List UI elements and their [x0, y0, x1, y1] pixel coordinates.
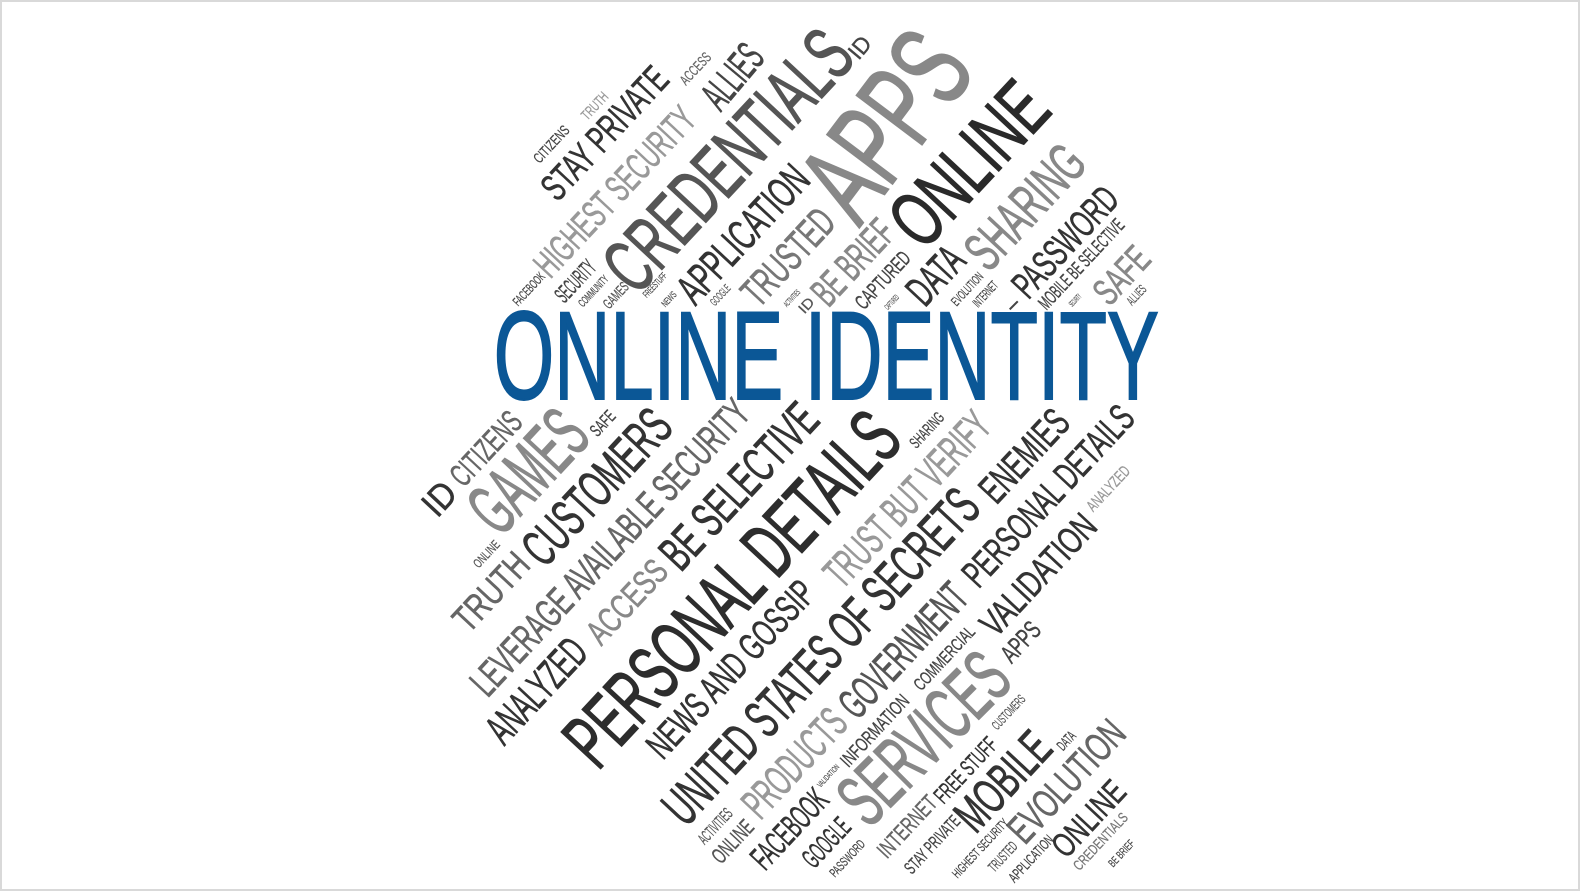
word: ANALYZED: ANALYZED: [1083, 462, 1134, 515]
word: GOVERNMENT: GOVERNMENT: [829, 574, 978, 728]
word: SHARING: SHARING: [952, 132, 1098, 282]
word cloud: online identity: CAPTURED: [883, 293, 901, 312]
word: BE BRIEF: BE BRIEF: [802, 210, 904, 315]
word: PERSONAL DETAILS: PERSONAL DETAILS: [546, 394, 918, 783]
word: CITIZENS: CITIZENS: [442, 404, 529, 493]
word: GOOGLE: GOOGLE: [708, 283, 734, 309]
word: ACTIVITIES: ACTIVITIES: [782, 288, 802, 309]
word: TRUST BUT VERIFY: TRUST BUT VERIFY: [815, 402, 1001, 597]
word: FREESTUFF: FREESTUFF: [641, 271, 670, 300]
word: ACCESS: ACCESS: [677, 50, 715, 89]
word: ONLINE: ONLINE: [1044, 773, 1134, 865]
dash: [1010, 301, 1018, 309]
word: ID: ID: [796, 295, 818, 317]
word: APPLICATION: APPLICATION: [1006, 832, 1057, 886]
word: NEWS: NEWS: [660, 290, 679, 310]
word: NEWS AND GOSSIP: NEWS AND GOSSIP: [638, 572, 824, 767]
word: BE BRIEF: BE BRIEF: [1107, 838, 1137, 870]
title: ONLINE IDENTITY: ONLINE IDENTITY: [494, 287, 1159, 426]
word: APPS: APPS: [996, 616, 1047, 668]
word: ONLINE: ONLINE: [470, 537, 503, 571]
word: INTERNET: INTERNET: [969, 278, 1001, 310]
word: SERVICES: SERVICES: [821, 636, 1027, 842]
word: CUSTOMERS: CUSTOMERS: [988, 692, 1028, 733]
word: CREDENTIALS: CREDENTIALS: [1071, 810, 1132, 874]
word: DATA: DATA: [1054, 728, 1080, 754]
word: ID: ID: [843, 31, 877, 64]
word: INFORMATION: INFORMATION: [836, 690, 914, 772]
word: GAMES: GAMES: [451, 393, 605, 549]
word: PERSONAL DETAILS: PERSONAL DETAILS: [954, 397, 1143, 596]
word cloud: online identity: [413, 7, 1159, 886]
word: EVOLUTION: EVOLUTION: [948, 269, 986, 309]
word: STAY PRIVATE: STAY PRIVATE: [900, 811, 964, 878]
word: BE SELECTIVE: BE SELECTIVE: [649, 392, 830, 580]
word: APPLICATION: APPLICATION: [668, 156, 819, 314]
word: EVOLUTION: EVOLUTION: [999, 711, 1135, 852]
word: FACEBOOK: FACEBOOK: [743, 781, 836, 877]
word: SECURITY: SECURITY: [550, 255, 601, 307]
word: CITIZENS: CITIZENS: [531, 123, 573, 167]
word: SAFE: SAFE: [1085, 238, 1159, 313]
word: TRUSTED: TRUSTED: [986, 839, 1021, 876]
word: SHARING: SHARING: [906, 409, 948, 452]
word: GAMES: GAMES: [600, 279, 633, 312]
word: TRUSTED: TRUSTED: [732, 199, 844, 315]
word cloud: online identity: SECURITY: [1067, 292, 1083, 309]
word: COMMERCIAL: COMMERCIAL: [909, 622, 979, 694]
word: MOBILE BE SELECTIVE: MOBILE BE SELECTIVE: [1034, 214, 1129, 314]
word: HIGHEST SECURITY: HIGHEST SECURITY: [949, 815, 1012, 881]
word: TRUTH: TRUTH: [578, 89, 612, 124]
word: CUSTOMERS: CUSTOMERS: [511, 398, 684, 577]
word: MOBILE: MOBILE: [943, 720, 1063, 843]
word: CAPTURED: CAPTURED: [851, 247, 916, 314]
word: ONLINE: ONLINE: [706, 815, 759, 868]
word: SAFE: SAFE: [586, 406, 620, 440]
word: PASSWORD: PASSWORD: [826, 837, 868, 880]
word: VALIDATION: VALIDATION: [971, 505, 1105, 644]
word: ID: ID: [413, 473, 465, 524]
word: UNITED STATES OF SECRETS: UNITED STATES OF SECRETS: [650, 476, 991, 836]
word: COMMUNITY: COMMUNITY: [576, 273, 612, 310]
word: FREE STUFF: FREE STUFF: [928, 732, 1002, 808]
word: DATA: DATA: [897, 237, 975, 315]
word: VALIDATION: VALIDATION: [815, 762, 841, 789]
word: ANALYZED: ANALYZED: [476, 629, 597, 753]
word: ALLIES: ALLIES: [1123, 282, 1149, 308]
word: PASSWORD: PASSWORD: [1003, 178, 1128, 307]
word: INTERNET: INTERNET: [872, 790, 942, 863]
word: ACCESS: ACCESS: [579, 552, 676, 652]
word: LEVERAGE AVAILABLE SECURITY: LEVERAGE AVAILABLE SECURITY: [461, 390, 759, 705]
word: GOOGLE: GOOGLE: [795, 811, 857, 874]
word: TRUTH: TRUTH: [444, 543, 538, 640]
word: ACTIVITIES: ACTIVITIES: [694, 805, 737, 848]
word: FACEBOOK: FACEBOOK: [509, 269, 548, 309]
word: ENEMIES: ENEMIES: [970, 400, 1079, 512]
word: PRODUCTS: PRODUCTS: [733, 699, 857, 828]
